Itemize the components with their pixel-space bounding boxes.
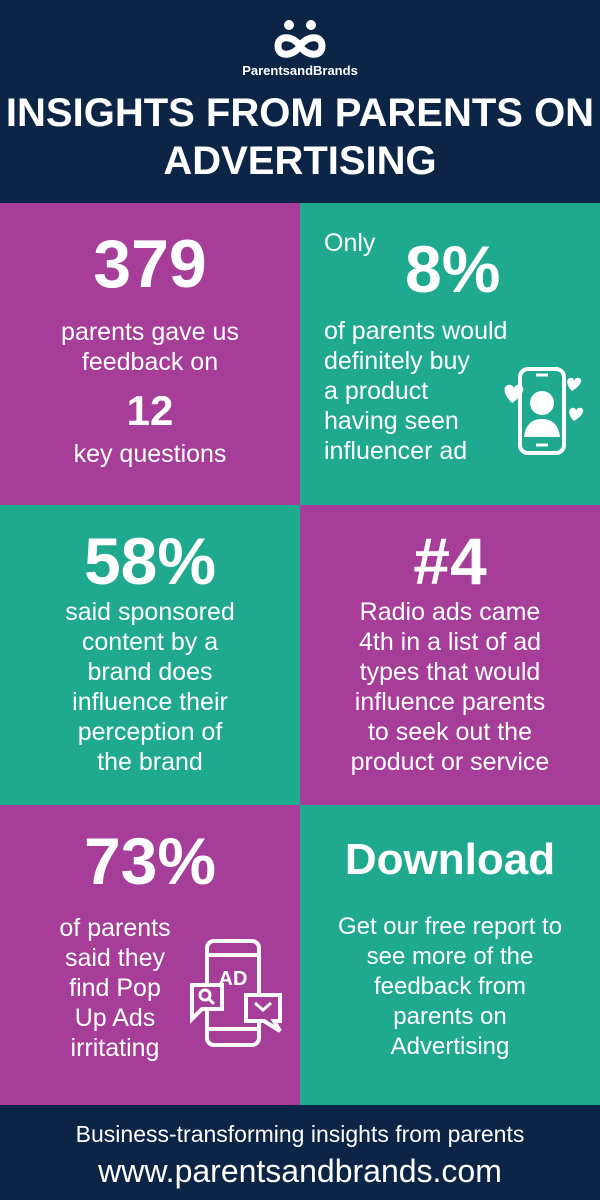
icon: ad phone: AD [219, 968, 247, 990]
panel: 58% sponsored: influence their [72, 688, 228, 716]
title [6, 91, 594, 183]
footer: www.parentsandbrands.com [98, 1153, 502, 1189]
panel: download: Get our free report to [338, 913, 562, 940]
panel: 73% pop up: irritating [71, 1034, 159, 1062]
title: ADVERTISING [163, 139, 437, 183]
panel: #4 radio: product or service [351, 748, 549, 776]
panel: 58% sponsored: brand does [87, 658, 213, 686]
footer: Business-transforming insights from parents [76, 1121, 524, 1147]
footer [0, 1105, 600, 1200]
logo: ParentsandBrands [242, 63, 358, 78]
panel: download: parents on [393, 1003, 507, 1030]
panel: 379 parents: 379 [93, 226, 207, 302]
panel: #4 radio: to seek out the [368, 718, 532, 746]
panel: download: Download [345, 835, 555, 884]
panel: #4 radio [300, 505, 600, 805]
panel: 379 parents: key questions [74, 440, 226, 468]
header [0, 0, 600, 203]
icon: ad phone [190, 939, 282, 1047]
panel: 8% influencer: 8% [405, 232, 500, 306]
panel: 58% sponsored: perception of [78, 718, 222, 746]
panel: 73% pop up: Up Ads [75, 1004, 155, 1032]
panel: 58% sponsored [0, 505, 300, 805]
panel: 58% sponsored: the brand [97, 748, 203, 776]
panel: #4 radio: Radio ads came [360, 598, 540, 626]
panel: download: see more of the [367, 943, 533, 970]
panel: #4 radio: types that would [360, 658, 540, 686]
panel: 73% pop up: 73% [84, 824, 216, 898]
panel: 8% influencer [300, 203, 600, 505]
panel: 8% influencer: having seen [324, 407, 459, 435]
panel: 8% influencer: of parents would [324, 317, 507, 345]
panel: 8% influencer: Only [324, 229, 375, 257]
panel: #4 radio: #4 [413, 524, 487, 598]
panel: 73% pop up: of parents [59, 914, 171, 942]
panel: download: feedback from [374, 973, 526, 1000]
panel: 58% sponsored: said sponsored [65, 598, 235, 626]
title: INSIGHTS FROM PARENTS ON [6, 91, 594, 135]
panel: 73% pop up: find Pop [69, 974, 161, 1002]
icon: phone with influencer [504, 367, 584, 455]
panel: 73% pop up: said they [65, 944, 165, 972]
panel: 379 parents: 12 [127, 387, 173, 434]
panel: 8% influencer: definitely buy [324, 347, 470, 375]
panel: 8% influencer: a product [324, 377, 428, 405]
panel: 73% pop up [0, 805, 300, 1105]
panel: 58% sponsored: content by a [82, 628, 218, 656]
panel: download [300, 805, 600, 1105]
panel: 379 parents [0, 203, 300, 505]
panel: #4 radio: 4th in a list of ad [359, 628, 541, 656]
panel: 58% sponsored: 58% [84, 524, 216, 598]
panel: #4 radio: influence parents [355, 688, 545, 716]
panel: 379 parents: parents gave us [61, 318, 239, 346]
panel: 8% influencer: influencer ad [324, 437, 467, 465]
panel: download: Advertising [391, 1033, 509, 1060]
logo [242, 20, 358, 78]
panel: 379 parents: feedback on [82, 348, 218, 376]
